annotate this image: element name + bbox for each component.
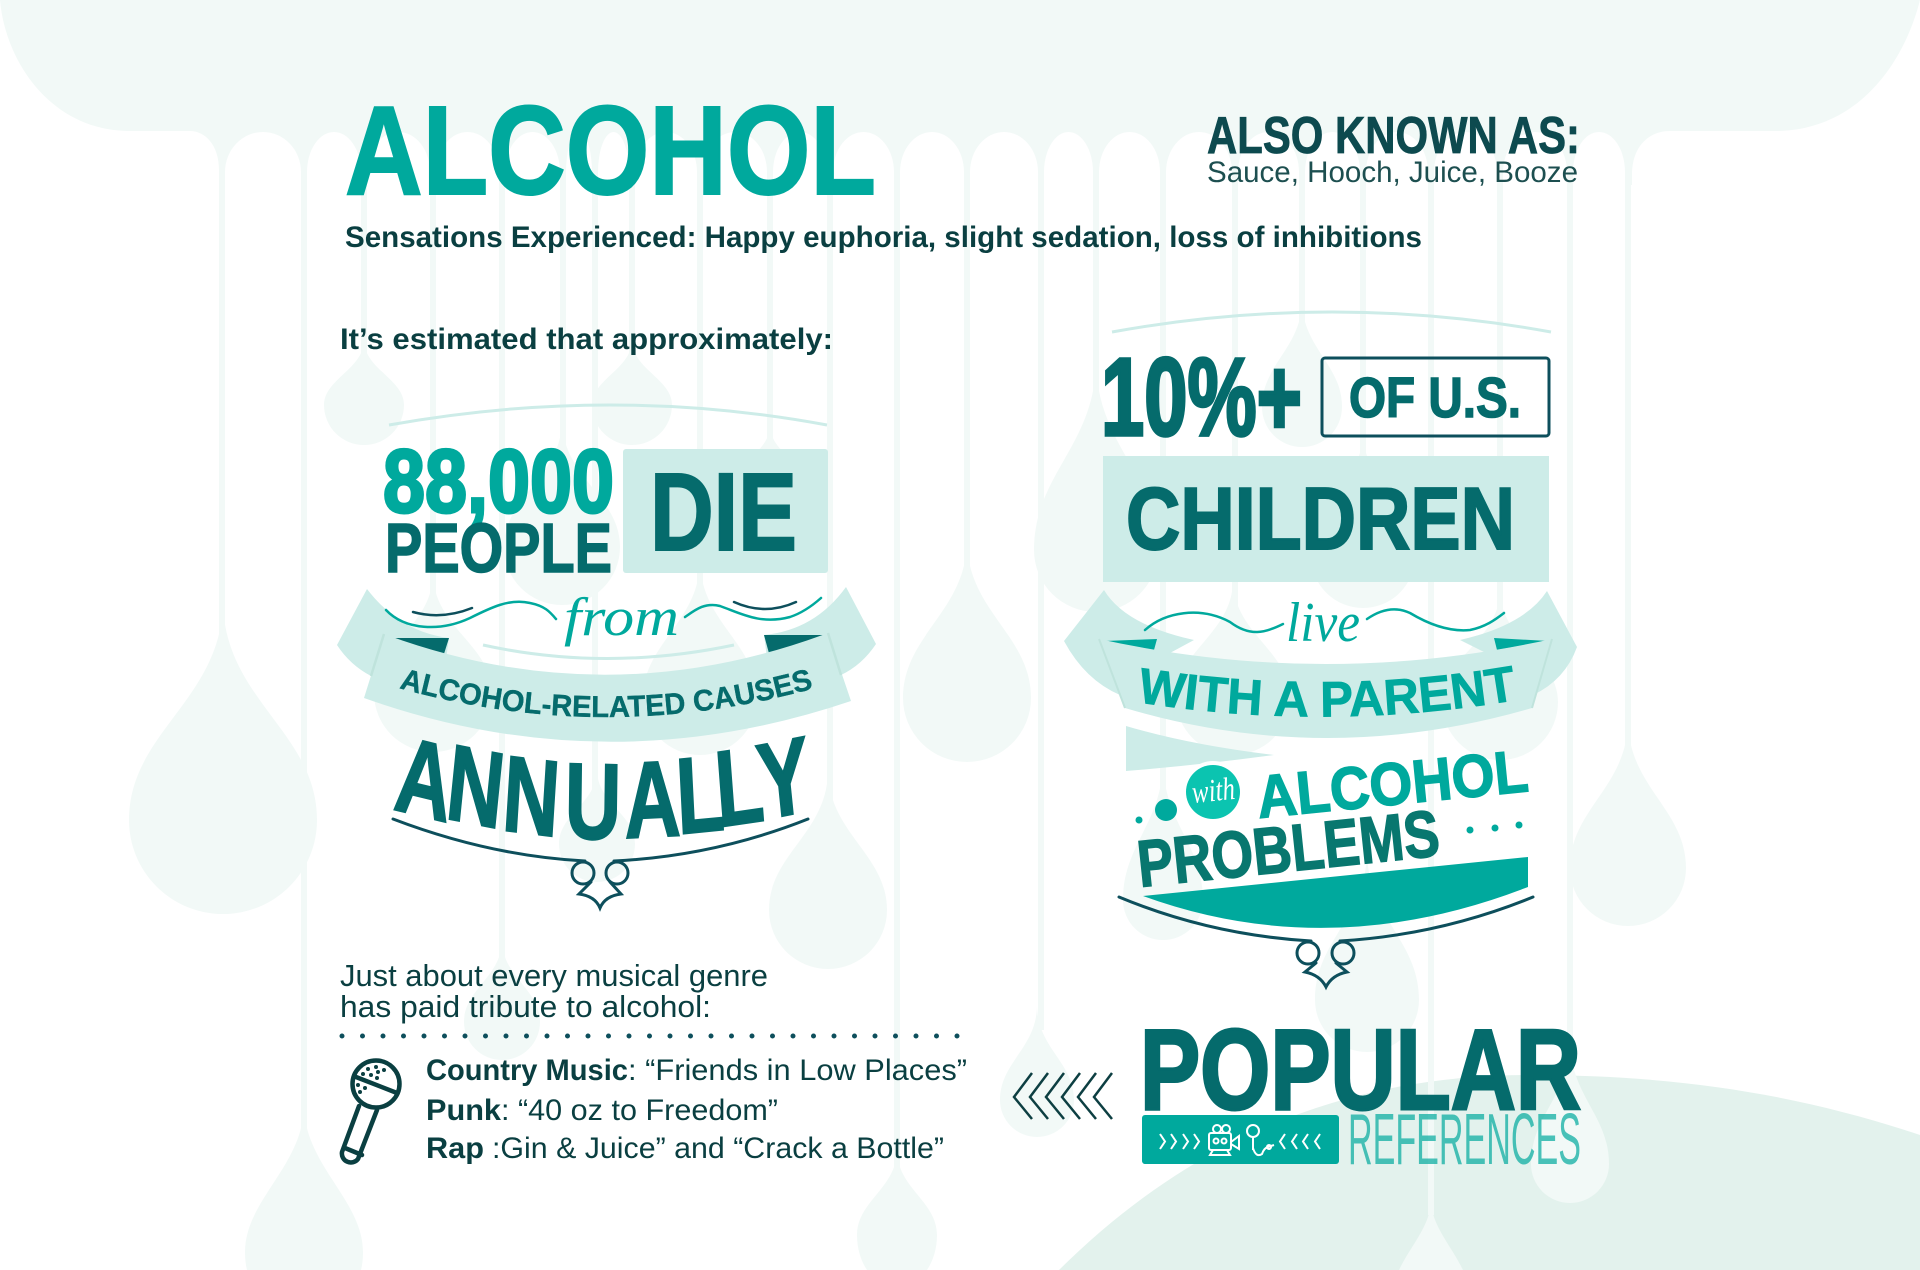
- word: POPULAR: POPULAR: [1140, 1007, 1581, 1134]
- alias names: Sauce, Hooch, Juice, Booze: [1207, 156, 1578, 189]
- row: punk: Punk: [426, 1094, 501, 1127]
- flourish with script word: from: from: [564, 587, 679, 647]
- music intro text: [340, 958, 768, 1024]
- box: of U.S.: OF U.S.: [1349, 366, 1521, 430]
- ribbon: with a parent: WITH A PARENT: [1141, 666, 1513, 717]
- ribbon: alcohol-related causes: ALCOHOL-RELATED CAUSES: [399, 670, 812, 718]
- song list: [426, 1054, 967, 1165]
- intro line: It’s estimated that approximately:: [340, 323, 833, 356]
- word: ALCOHOL: ALCOHOL: [1254, 737, 1531, 831]
- swash: [1143, 857, 1528, 928]
- ornament: underline with scroll: [1119, 897, 1533, 987]
- music intro text: has paid tribute to alcohol:: [340, 989, 711, 1024]
- figure: 88,000: 88,000: [383, 432, 614, 532]
- badge: CHILDREN: CHILDREN: [1126, 469, 1515, 568]
- heading: popular references: [1140, 1007, 1581, 1180]
- word: ANNUALLY: ANNUALLY: [390, 713, 815, 862]
- flourish with script word: from: [386, 587, 821, 658]
- decorative dots: [1136, 799, 1522, 834]
- row: punk: : “40 oz to Freedom”: [501, 1094, 778, 1127]
- icon: film camera: [1209, 1125, 1239, 1155]
- icon: microphone: [1247, 1125, 1274, 1155]
- row: rap: Rap: [426, 1132, 484, 1165]
- word: PROBLEMS: PROBLEMS: [1134, 796, 1443, 901]
- label: PEOPLE: PEOPLE: [385, 509, 612, 587]
- title: ALCOHOL: ALCOHOL: [345, 80, 876, 221]
- sensations line: Sensations Experienced: Happy euphoria, slight sedation, loss of inhibitions: [345, 221, 1422, 254]
- dotted divider: [342, 1034, 962, 1038]
- ornament: underline with scroll: [393, 819, 808, 908]
- flourish with script word: live: live: [1286, 592, 1360, 654]
- text: REFERENCES: [1348, 1100, 1581, 1180]
- ribbon: alcohol-related causes: [337, 587, 876, 742]
- icon bar: [1142, 1115, 1339, 1164]
- heading: also known as: ALSO KNOWN AS:: [1207, 107, 1580, 165]
- badge: with: [1182, 761, 1244, 823]
- flourish with script word: live: [1145, 592, 1504, 654]
- figure: 10%+: 10%+: [1101, 336, 1302, 459]
- panel: 88,000 deaths: [337, 404, 876, 912]
- row: rap: :Gin & Juice” and “Crack a Bottle”: [492, 1132, 944, 1165]
- row: country: Country Music: [426, 1054, 628, 1087]
- badge: with: with: [1190, 770, 1237, 810]
- icon: microphone: [342, 1060, 400, 1163]
- badge: DIE: DIE: [650, 451, 797, 574]
- row: country: : “Friends in Low Places”: [628, 1054, 967, 1087]
- arrow: chevrons pointing left: [1014, 1073, 1112, 1119]
- music intro text: Just about every musical genre: [340, 958, 768, 993]
- panel: 10% of children: [1064, 310, 1577, 990]
- ribbon: with a parent: [1064, 590, 1577, 771]
- aliases block: [1207, 107, 1580, 189]
